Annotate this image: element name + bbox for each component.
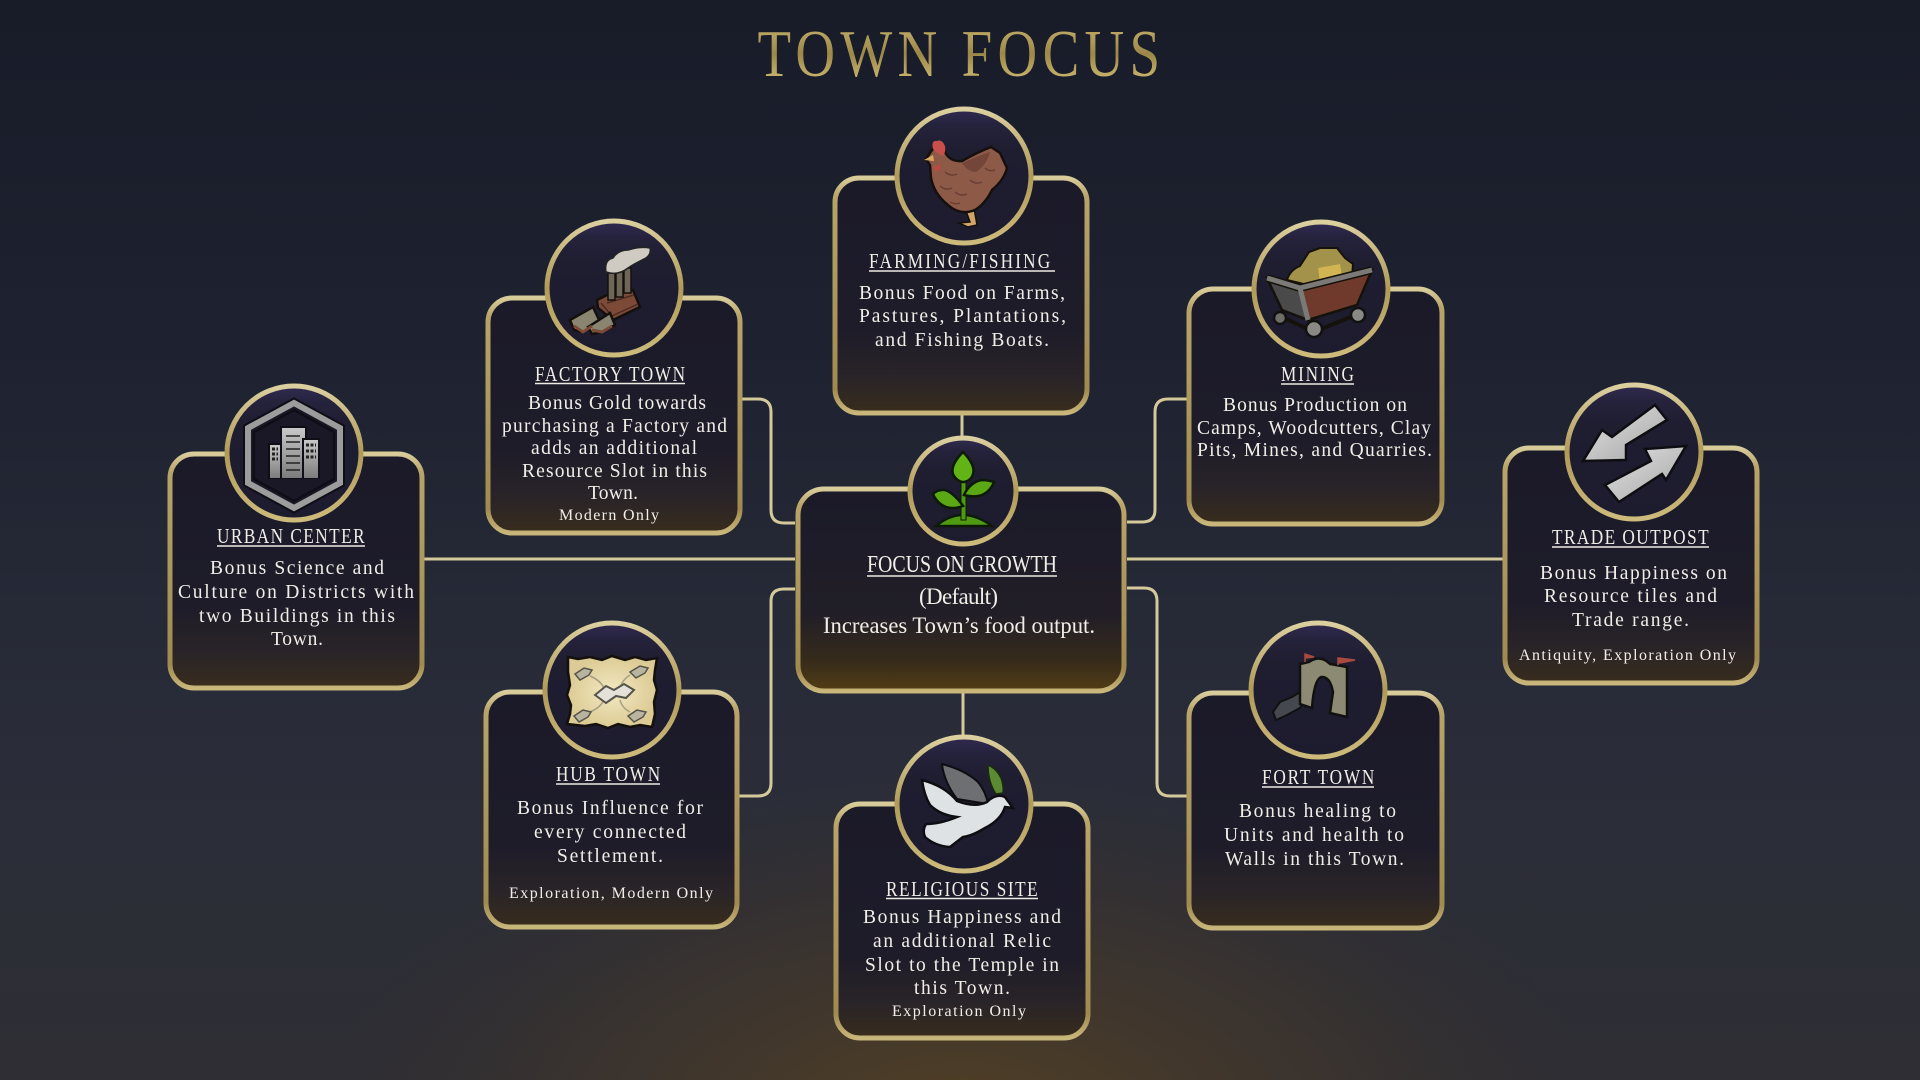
description: Slot to the Temple in [865,955,1059,976]
icon: fort gate [1251,623,1385,757]
icon: trade arrows [1567,385,1701,519]
connectors [424,399,1503,796]
description [823,584,1095,638]
description: Units and health to [1224,825,1404,846]
icon: chicken [897,109,1031,243]
card: Urban Center [170,386,422,688]
icon: plant sprout [910,438,1016,544]
heading: HUB TOWN [556,764,660,786]
card frame [1189,289,1442,524]
description [509,798,713,902]
card: Hub Town [486,623,737,927]
description: Bonus Happiness and [863,907,1061,928]
card frame [488,298,740,533]
description: Camps, Woodcutters, Clay [1197,418,1431,439]
description: Walls in this Town. [1225,849,1404,870]
description [178,558,414,650]
icon: parchment map [545,623,679,757]
heading: FARMING/FISHING [869,251,1050,273]
heading: URBAN CENTER [217,526,365,548]
description [863,907,1061,1020]
description: Trade range. [1572,610,1689,631]
card frame [1505,448,1757,683]
card frame [1189,693,1442,928]
description: Bonus Gold towards [528,393,706,414]
description: Bonus Food on Farms, [859,283,1065,304]
description: Resource tiles and [1544,586,1717,607]
description: Bonus Happiness on [1540,563,1727,584]
icon: city hexagon [227,386,361,520]
card: Farming/Fishing [835,109,1087,413]
icon: factory [547,221,681,355]
description: this Town. [914,978,1010,999]
card: Fort Town [1189,623,1442,928]
description: Town. [271,629,323,650]
description: an additional Relic [873,931,1051,952]
description: Resource Slot in this [522,461,707,482]
center card: Focus on Growth [798,438,1124,691]
card: Factory Town [488,221,740,533]
description: adds an additional [531,438,698,459]
heading: MINING [1281,364,1354,386]
description [502,393,727,524]
description: Bonus Science and [210,558,384,579]
description: Modern Only [559,507,659,524]
card: Trade Outpost [1505,385,1757,683]
description: Culture on Districts with [178,582,414,603]
heading: FORT TOWN [1262,767,1374,789]
description: purchasing a Factory and [502,416,727,437]
card: Mining [1189,222,1442,524]
heading: FOCUS ON GROWTH [867,552,1057,578]
description: Bonus Production on [1223,395,1407,416]
heading: FACTORY TOWN [535,364,685,386]
description: Settlement. [557,846,663,867]
card frame [835,178,1087,413]
description: Bonus Influence for [517,798,704,819]
description [1519,563,1736,664]
description: Pits, Mines, and Quarries. [1197,440,1432,461]
title: TOWN FOCUS [758,17,1160,91]
heading: TRADE OUTPOST [1552,527,1709,549]
description [1224,801,1404,870]
heading: RELIGIOUS SITE [886,879,1038,901]
description: Town. [588,483,638,504]
description: every connected [534,822,686,843]
description: Exploration Only [892,1003,1026,1020]
icon: dove [897,737,1031,871]
card frame [836,804,1088,1038]
description: two Buildings in this [199,606,395,627]
description: and Fishing Boats. [875,330,1049,351]
description [1197,395,1432,461]
description: Increases Town’s food output. [823,613,1095,638]
description: Exploration, Modern Only [509,885,713,902]
description: Antiquity, Exploration Only [1519,647,1736,664]
description: Bonus healing to [1239,801,1396,822]
card frame [486,692,737,927]
card frame [170,454,422,688]
description: (Default) [919,584,998,609]
card: Religious Site [836,737,1088,1038]
icon: mine cart [1254,222,1388,356]
card frame [798,489,1124,691]
description [859,283,1066,351]
description: Pastures, Plantations, [859,306,1066,327]
